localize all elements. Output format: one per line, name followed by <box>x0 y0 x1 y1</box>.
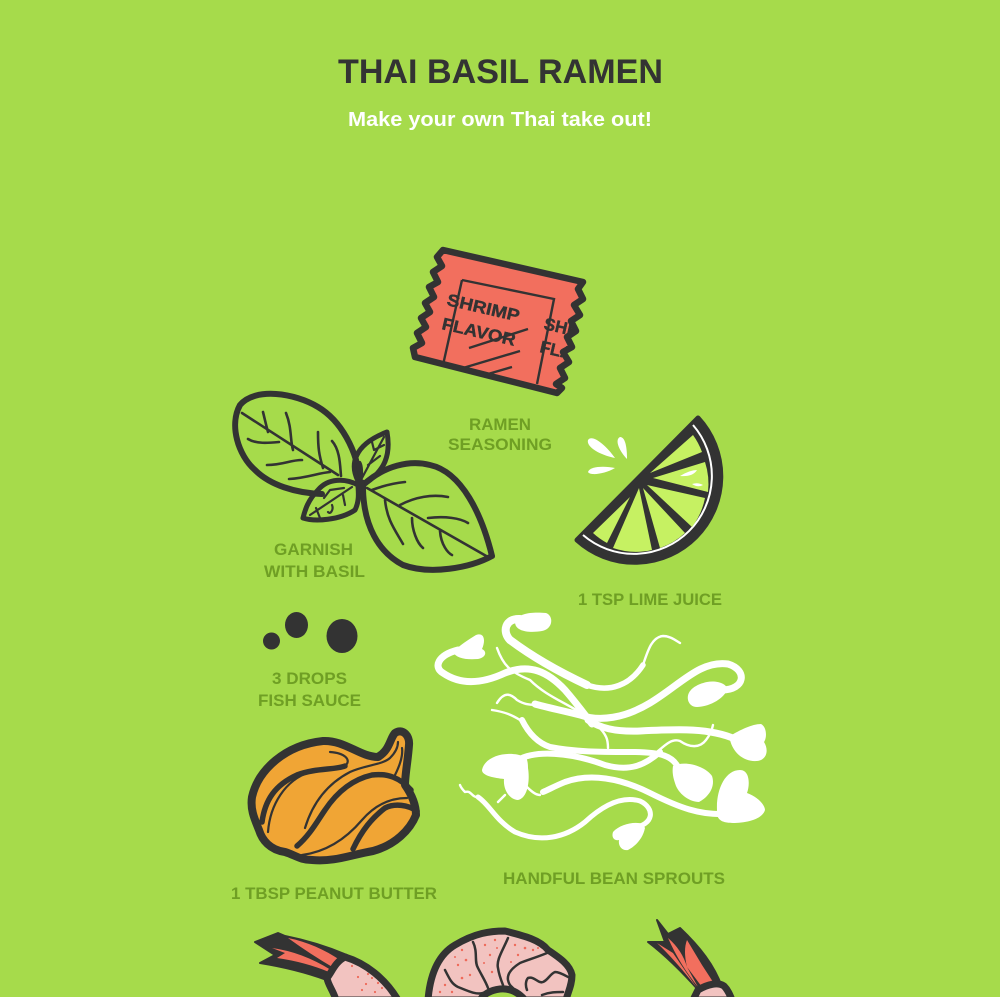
icon: fish sauce drops <box>263 612 358 653</box>
icon: lime wedge <box>577 418 721 562</box>
title: THAI BASIL RAMEN <box>338 53 663 91</box>
label: fish sauce <box>258 669 361 710</box>
icon: ramen seasoning packet: FLAVOR <box>440 314 517 350</box>
label: fish sauce: FISH SAUCE <box>258 691 361 710</box>
label: bean sprouts: HANDFUL BEAN SPROUTS <box>503 869 725 888</box>
label: ramen seasoning: SEASONING <box>448 435 552 454</box>
icon: ramen seasoning packet: FLAVOR <box>538 337 609 371</box>
label: lime juice: 1 TSP LIME JUICE <box>578 590 722 609</box>
icon: juice splash <box>588 437 627 474</box>
subtitle: Make your own Thai take out! <box>348 109 652 131</box>
icon: ramen seasoning packet: SHRIMP <box>542 314 611 348</box>
label: garnish with basil: WITH BASIL <box>264 562 365 581</box>
icon: ramen seasoning packet <box>413 250 611 393</box>
label: ramen seasoning <box>448 415 552 454</box>
icon: ramen seasoning packet: SHRIMP <box>445 290 521 326</box>
label: garnish with basil <box>264 540 365 581</box>
label: fish sauce: 3 DROPS <box>272 669 347 688</box>
label: garnish with basil: GARNISH <box>274 540 353 559</box>
icon: basil leaves <box>235 394 492 570</box>
icon: peanut butter <box>252 731 417 860</box>
sprout heads <box>453 613 767 850</box>
label: peanut butter: 1 TBSP PEANUT BUTTER <box>231 884 437 903</box>
icon: shrimp middle <box>428 931 572 997</box>
label: ramen seasoning: RAMEN <box>469 415 531 434</box>
icon: shrimp left <box>255 933 398 997</box>
icon: shrimp right <box>648 920 732 997</box>
icon: bean sprouts <box>438 613 767 850</box>
